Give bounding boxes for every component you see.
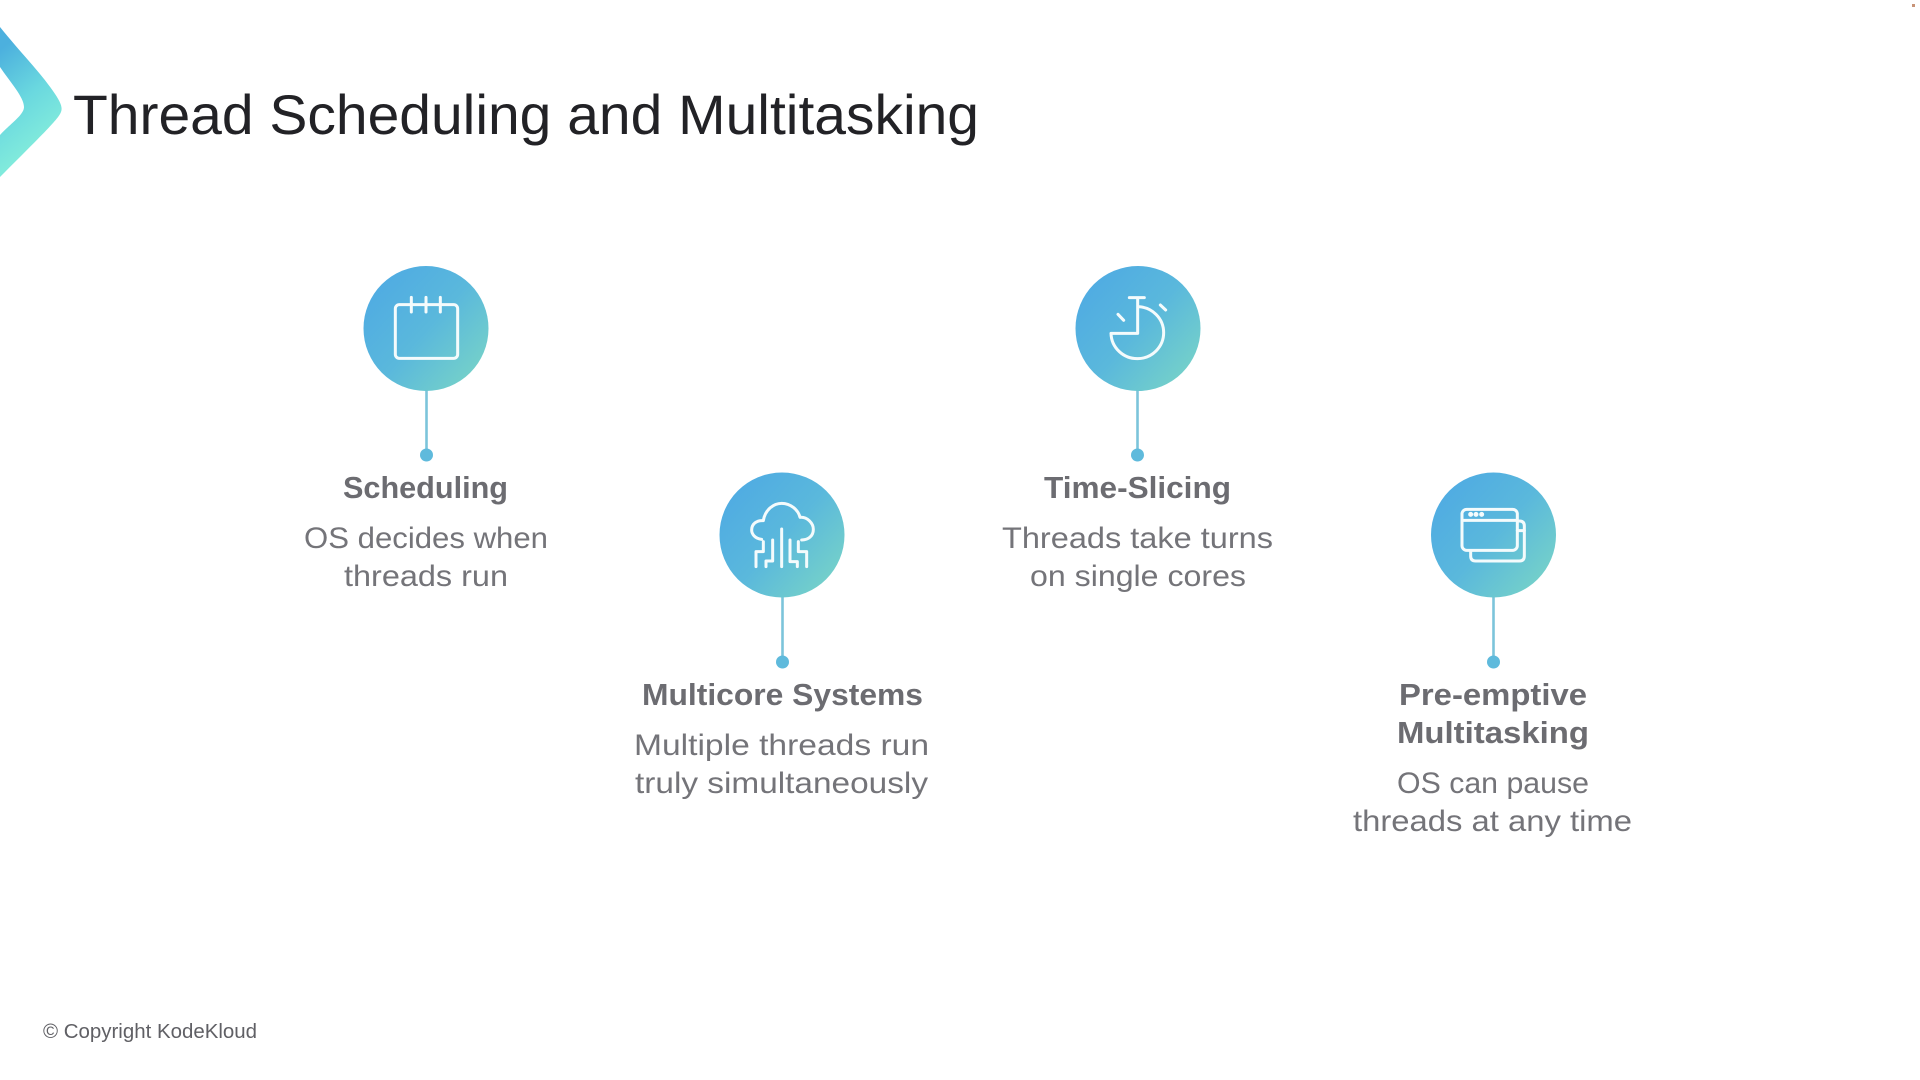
heading: Scheduling: Scheduling: [343, 470, 508, 505]
connector dot: [1131, 448, 1144, 462]
description: Pre-emptive Multitasking: [1353, 767, 1632, 838]
icon: stopwatch: [1111, 298, 1166, 359]
description: Scheduling: threads run: [344, 560, 508, 593]
copyright footer: © Copyright KodeKloud: [43, 1021, 257, 1043]
connector line: [425, 390, 428, 455]
item: Time-Slicing: [1002, 266, 1273, 593]
heading: Multicore Systems: Multicore Systems: [642, 677, 923, 712]
title: Thread Scheduling and Multitasking: [73, 83, 979, 146]
connector dot: [420, 448, 433, 462]
description: Multicore Systems: Multiple threads run: [634, 729, 929, 762]
icon: cloud circuit: [752, 503, 813, 567]
logo chevron: [0, 27, 62, 177]
heading: Pre-emptive Multitasking: Pre-emptive: [1399, 677, 1587, 712]
connector line: [1492, 596, 1495, 662]
connector dot: [776, 656, 789, 668]
description: Time-Slicing: on single cores: [1030, 560, 1246, 593]
item: Scheduling: [304, 266, 548, 593]
description: Multicore Systems: truly simultaneously: [635, 767, 928, 800]
connector line: [1136, 390, 1139, 455]
heading: Pre-emptive Multitasking: Multitasking: [1397, 715, 1589, 750]
icon: calendar: [395, 297, 458, 358]
icon circle: [1076, 266, 1200, 391]
corner speck: [1912, 4, 1915, 7]
icon circle: [364, 266, 488, 391]
icon circle: [1431, 472, 1556, 598]
description: Scheduling: OS decides when: [304, 522, 548, 555]
connector dot: [1487, 656, 1500, 668]
description: Pre-emptive Multitasking: OS can pause: [1397, 767, 1589, 800]
description: Multicore Systems: [634, 729, 929, 800]
description: Scheduling: [304, 522, 548, 593]
description: Pre-emptive Multitasking: threads at any time: [1353, 805, 1632, 838]
description: Time-Slicing: [1002, 522, 1273, 593]
connector line: [781, 596, 784, 662]
item: Multicore Systems: [634, 472, 929, 800]
item: Pre-emptive Multitasking: [1353, 472, 1632, 838]
heading: Time-Slicing: Time-Slicing: [1044, 470, 1231, 505]
description: Time-Slicing: Threads take turns: [1002, 522, 1273, 555]
icon circle: [720, 472, 844, 598]
icon: windows: [1462, 509, 1524, 561]
heading: Pre-emptive Multitasking: [1397, 677, 1589, 750]
